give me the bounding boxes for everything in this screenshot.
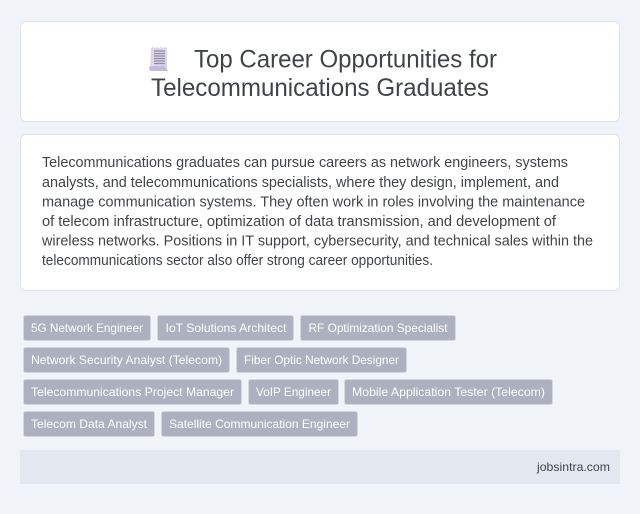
title: Telecommunications Graduates [151, 74, 489, 102]
tag: Satellite Communication Engineer [162, 412, 358, 436]
tag: Network Security Analyst (Telecom): Network Security Analyst (Telecom) [31, 353, 222, 367]
description text: telecommunications sector also offer strong career opportunities. [42, 253, 433, 269]
tag: Fiber Optic Network Designer: Fiber Optic Network Designer [244, 353, 399, 367]
tag: RF Optimization Specialist: RF Optimization Specialist [308, 321, 448, 335]
tag: Satellite Communication Engineer: Satellite Communication Engineer [169, 417, 350, 431]
tag: Fiber Optic Network Designer [236, 348, 406, 372]
tag: Telecom Data Analyst: Telecom Data Analyst [31, 417, 148, 431]
description text: Telecommunications graduates can pursue careers as network engineers, systems [42, 155, 568, 171]
icon: document [149, 47, 169, 71]
description text [41, 155, 593, 269]
tag: VoIP Engineer [248, 380, 338, 404]
tag: 5G Network Engineer [24, 316, 150, 340]
tag: Mobile Application Tester (Telecom) [344, 380, 552, 404]
tag list [24, 316, 552, 436]
title [151, 46, 497, 102]
description text: wireless networks. Positions in IT support, cybersecurity, and technical sales within the [41, 234, 593, 250]
panel: header [20, 22, 620, 122]
footer [20, 450, 620, 484]
tag: 5G Network Engineer: 5G Network Engineer [31, 321, 143, 335]
tag: RF Optimization Specialist [300, 316, 456, 340]
tag: IoT Solutions Architect [158, 316, 294, 340]
tag: Mobile Application Tester (Telecom): Mobile Application Tester (Telecom) [352, 385, 545, 399]
tag: VoIP Engineer: VoIP Engineer [256, 385, 331, 399]
footer source text: jobsintra.com [536, 460, 610, 474]
description text: of telecom infrastructure, optimization of data transmission, and development of [42, 214, 557, 230]
tag: Telecom Data Analyst [24, 412, 154, 436]
panel: description [20, 134, 620, 290]
description text: manage communication systems. They often work in roles involving the maintenance [42, 194, 585, 210]
tag: Telecommunications Project Manager [24, 380, 242, 404]
tag: Network Security Analyst (Telecom) [24, 348, 230, 372]
description text: analysts, and telecommunications specialists, where they design, implement, and [42, 175, 559, 191]
tag: IoT Solutions Architect: IoT Solutions Architect [166, 321, 287, 335]
tag: Telecommunications Project Manager: Telecommunications Project Manager [31, 385, 234, 399]
title: Top Career Opportunities for [194, 46, 497, 74]
